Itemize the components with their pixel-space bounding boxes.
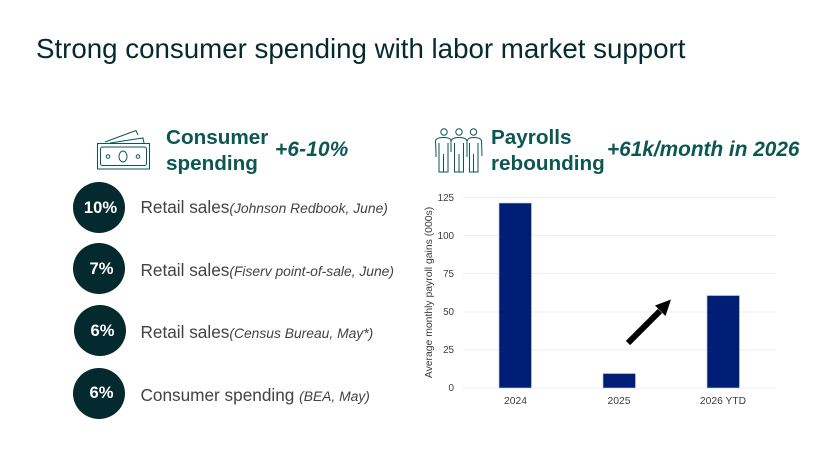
- y axis labels: 50: [443, 307, 455, 318]
- y axis labels: 100: [438, 231, 455, 242]
- x axis labels: 2026 YTD: [700, 396, 746, 407]
- x axis labels: 2024: [504, 396, 527, 407]
- label: Retail sales Census Bureau: Retail sales(Census Bureau, May*): [140, 322, 373, 342]
- label: Consumer spending BEA: Consumer spending (BEA, May): [140, 385, 370, 405]
- heading: payrolls rebounding: Payrolls: [491, 126, 572, 149]
- x axis labels: 2025: [608, 396, 631, 407]
- badge: 10%: [73, 182, 125, 233]
- heading: payrolls rebounding: rebounding: [491, 152, 605, 175]
- badge: 10%: 10%: [84, 198, 117, 217]
- label: Retail sales Fiserv: Retail sales(Fiserv point-of-sale, June): [140, 260, 394, 280]
- x axis labels: [504, 396, 746, 407]
- y axis labels: 25: [443, 345, 455, 356]
- bar chart: payroll gains: [424, 193, 776, 407]
- heading: consumer spending: Consumer: [166, 126, 268, 149]
- badge: 6%: 6%: [90, 383, 113, 402]
- icon: money: [97, 130, 150, 170]
- arrow: [628, 300, 671, 343]
- badge: 6%: 6%: [90, 321, 114, 340]
- callout: +61k/month in 2026: +61k/month in 2026: [607, 138, 799, 161]
- badge: 7%: [73, 243, 125, 294]
- y axis labels: [438, 193, 455, 394]
- label: Retail sales Johnson Redbook: Retail sales(Johnson Redbook, June): [140, 197, 388, 217]
- y axis title: Average monthly payroll gains (000s): [424, 207, 435, 378]
- icon: people: [435, 128, 482, 172]
- badge: 6%: [73, 368, 125, 419]
- stat row 4: [73, 368, 370, 419]
- stat row 2: [73, 243, 394, 294]
- stat row 3: [74, 305, 373, 356]
- y axis labels: 0: [449, 383, 455, 394]
- title: Strong consumer spending with labor market support: [36, 33, 685, 64]
- badge: 6%: [74, 305, 126, 356]
- stat row 1: [73, 182, 388, 233]
- y axis labels: 75: [443, 269, 455, 280]
- heading: payrolls rebounding: [491, 126, 605, 175]
- callout: +6-10%: +6-10%: [275, 138, 348, 161]
- bars: [499, 203, 740, 388]
- heading: consumer spending: spending: [166, 152, 258, 175]
- y axis labels: 125: [438, 193, 455, 204]
- badge: 7%: 7%: [90, 259, 113, 278]
- heading: consumer spending: [166, 126, 268, 175]
